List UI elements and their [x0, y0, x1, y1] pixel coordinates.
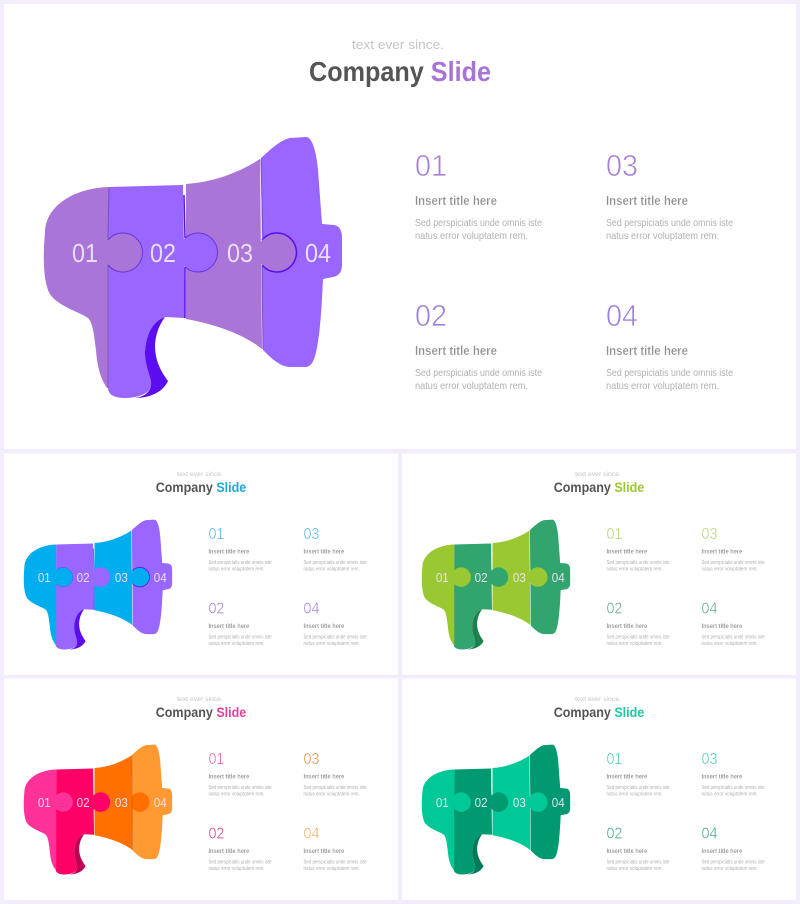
megaphone puzzle: [24, 520, 172, 650]
megaphone puzzle: 01: [38, 795, 51, 810]
megaphone puzzle: 04: [154, 570, 167, 585]
item 01: 01: [606, 751, 622, 768]
item 04: Sed perspiciatis unde omnis iste: [701, 635, 765, 641]
item 02: Sed perspiciatis unde omnis iste: [606, 635, 670, 641]
item 02: [415, 298, 542, 392]
item 02: 02: [208, 601, 224, 618]
panel: blue and purple slide: [4, 453, 398, 675]
item 03: Sed perspiciatis unde omnis iste: [701, 785, 765, 791]
item 03: natus error voluptatem rem.: [606, 230, 719, 242]
item 01: [208, 526, 272, 572]
item 04: natus error voluptatem rem.: [701, 866, 758, 872]
megaphone puzzle: [422, 745, 570, 875]
megaphone puzzle: 03: [513, 570, 526, 585]
item 03: natus error voluptatem rem.: [701, 566, 758, 572]
item 01: Insert title here: [208, 548, 250, 555]
item 01: Sed perspiciatis unde omnis iste: [208, 560, 272, 566]
megaphone puzzle: [24, 745, 172, 875]
item 03: Sed perspiciatis unde omnis iste: [303, 560, 367, 566]
title: Company Slide: [156, 479, 246, 495]
item 04: [701, 826, 765, 872]
item 03: Sed perspiciatis unde omnis iste: [701, 560, 765, 566]
item 04: 04: [701, 601, 718, 618]
item 03: Insert title here: [606, 193, 688, 208]
item 03: [303, 751, 367, 797]
item 04: 04: [303, 826, 320, 843]
item 01: 01: [606, 526, 622, 543]
item 02: natus error voluptatem rem.: [208, 866, 265, 872]
item 04: Insert title here: [701, 848, 743, 855]
item 04: Sed perspiciatis unde omnis iste: [303, 860, 367, 866]
item 04: Insert title here: [606, 343, 688, 358]
item 03: [701, 751, 765, 797]
megaphone puzzle: 04: [154, 795, 167, 810]
item 02: 02: [415, 298, 447, 333]
item 04: [303, 601, 367, 647]
megaphone puzzle: 04: [552, 795, 565, 810]
item 04: Insert title here: [701, 623, 743, 630]
item 01: 01: [415, 148, 447, 183]
item 03: Insert title here: [701, 773, 743, 780]
item 02: natus error voluptatem rem.: [208, 641, 265, 647]
megaphone puzzle: 03: [115, 795, 128, 810]
item 03: 03: [701, 526, 717, 543]
item 01: Sed perspiciatis unde omnis iste: [415, 217, 542, 229]
item 02: [208, 826, 272, 872]
item 02: [606, 826, 670, 872]
item 03: Sed perspiciatis unde omnis iste: [606, 217, 733, 229]
item 03: Insert title here: [303, 773, 345, 780]
item 02: natus error voluptatem rem.: [606, 641, 663, 647]
item 01: [606, 751, 670, 797]
item 04: natus error voluptatem rem.: [701, 641, 758, 647]
item 01: Insert title here: [606, 548, 648, 555]
item 04: 04: [701, 826, 718, 843]
item 04: [701, 601, 765, 647]
megaphone puzzle: 03: [513, 795, 526, 810]
item 02: natus error voluptatem rem.: [415, 380, 528, 392]
item 01: natus error voluptatem rem.: [415, 230, 528, 242]
item 03: natus error voluptatem rem.: [303, 566, 360, 572]
panel: teal slide: [402, 678, 796, 900]
item 04: [606, 298, 733, 392]
item 02: Sed perspiciatis unde omnis iste: [208, 860, 272, 866]
item 01: [606, 526, 670, 572]
tagline: text ever since.: [177, 696, 223, 703]
item 02: Sed perspiciatis unde omnis iste: [208, 635, 272, 641]
item 01: Insert title here: [606, 773, 648, 780]
item 04: natus error voluptatem rem.: [303, 641, 360, 647]
item 04: Sed perspiciatis unde omnis iste: [701, 860, 765, 866]
item 04: Sed perspiciatis unde omnis iste: [303, 635, 367, 641]
megaphone puzzle: 01: [72, 238, 98, 268]
item 04: Insert title here: [303, 848, 345, 855]
item 02: Sed perspiciatis unde omnis iste: [415, 367, 542, 379]
tagline: text ever since.: [575, 696, 621, 703]
item 02: Insert title here: [606, 848, 648, 855]
item 03: [701, 526, 765, 572]
item 01: 01: [208, 751, 224, 768]
item 04: Sed perspiciatis unde omnis iste: [606, 367, 733, 379]
item 01: [208, 751, 272, 797]
item 04: Insert title here: [303, 623, 345, 630]
item 01: natus error voluptatem rem.: [208, 791, 265, 797]
panel: lime and green slide: [402, 453, 796, 675]
item 03: natus error voluptatem rem.: [303, 791, 360, 797]
item 03: Insert title here: [303, 548, 345, 555]
item 02: 02: [606, 826, 622, 843]
item 04: 04: [606, 298, 638, 333]
item 01: natus error voluptatem rem.: [606, 566, 663, 572]
tagline: text ever since.: [352, 37, 444, 52]
megaphone puzzle: 03: [115, 570, 128, 585]
item 02: [606, 601, 670, 647]
item 02: [208, 601, 272, 647]
item 01: Sed perspiciatis unde omnis iste: [606, 560, 670, 566]
item 03: Insert title here: [701, 548, 743, 555]
item 02: 02: [208, 826, 224, 843]
megaphone puzzle: 03: [227, 238, 253, 268]
item 01: Sed perspiciatis unde omnis iste: [208, 785, 272, 791]
item 02: Sed perspiciatis unde omnis iste: [606, 860, 670, 866]
megaphone puzzle: 01: [436, 795, 449, 810]
item 03: [303, 526, 367, 572]
item 03: natus error voluptatem rem.: [701, 791, 758, 797]
item 04: natus error voluptatem rem.: [303, 866, 360, 872]
item 01: Insert title here: [208, 773, 250, 780]
megaphone puzzle: 04: [552, 570, 565, 585]
item 01: Insert title here: [415, 193, 497, 208]
megaphone puzzle: 02: [475, 570, 488, 585]
megaphone puzzle: 02: [77, 570, 90, 585]
item 02: Insert title here: [208, 623, 250, 630]
panel: main purple slide: [4, 4, 796, 449]
title: Company Slide: [554, 704, 644, 720]
item 01: 01: [208, 526, 224, 543]
item 03: 03: [606, 148, 638, 183]
item 02: natus error voluptatem rem.: [606, 866, 663, 872]
item 02: Insert title here: [606, 623, 648, 630]
item 03: 03: [303, 526, 319, 543]
item 03: 03: [701, 751, 717, 768]
megaphone puzzle: 01: [38, 570, 51, 585]
title: Company Slide: [156, 704, 246, 720]
item 02: Insert title here: [208, 848, 250, 855]
megaphone puzzle: [44, 137, 342, 398]
item 02: Insert title here: [415, 343, 497, 358]
tagline: text ever since.: [575, 471, 621, 478]
megaphone puzzle: 02: [150, 238, 176, 268]
title: Company Slide: [554, 479, 644, 495]
megaphone puzzle: [422, 520, 570, 650]
item 03: Sed perspiciatis unde omnis iste: [303, 785, 367, 791]
megaphone puzzle: 04: [305, 238, 331, 268]
megaphone puzzle: 01: [436, 570, 449, 585]
megaphone puzzle: 02: [77, 795, 90, 810]
panel: pink and orange slide: [4, 678, 398, 900]
item 02: 02: [606, 601, 622, 618]
item 04: [303, 826, 367, 872]
title: Company Slide: [309, 56, 491, 87]
item 01: Sed perspiciatis unde omnis iste: [606, 785, 670, 791]
item 01: natus error voluptatem rem.: [606, 791, 663, 797]
item 01: natus error voluptatem rem.: [208, 566, 265, 572]
item 04: 04: [303, 601, 320, 618]
item 04: natus error voluptatem rem.: [606, 380, 719, 392]
item 03: [606, 148, 733, 242]
megaphone puzzle: 02: [475, 795, 488, 810]
item 01: [415, 148, 542, 242]
item 03: 03: [303, 751, 319, 768]
tagline: text ever since.: [177, 471, 223, 478]
